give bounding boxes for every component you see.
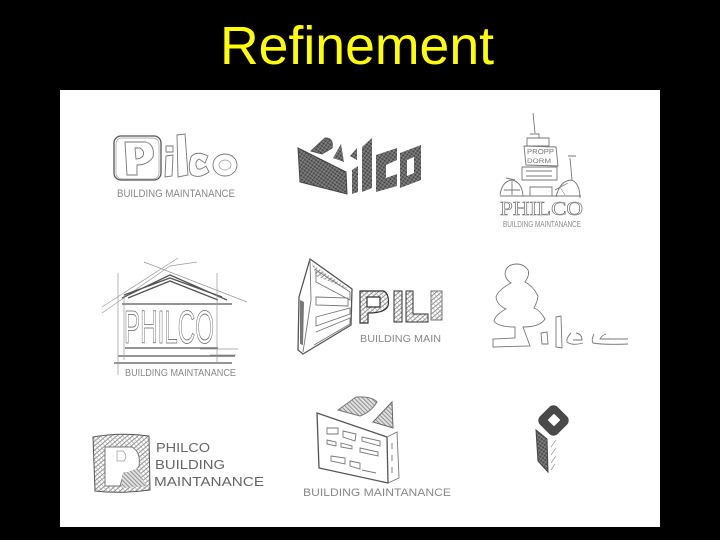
wordmark: PHILCO: PHILCO bbox=[500, 198, 583, 220]
sketch: Pilco boxed P logo bbox=[114, 134, 237, 200]
label: building main: BUILDING MAIN bbox=[360, 334, 441, 345]
wordmark: Philco building maintenance: MAINTANANCE bbox=[154, 474, 264, 489]
label: building maintenance: BUILDING MAINTANANCE bbox=[117, 188, 235, 200]
sketch: Philco hatched P logo bbox=[93, 434, 264, 492]
label: building maintenance: BUILDING MAINTANANCE bbox=[303, 487, 451, 499]
sketch: Philco skyscraper logo: DORM bbox=[527, 159, 551, 165]
small window text: PROPP bbox=[527, 149, 554, 156]
sketch: diamond and column icon bbox=[536, 403, 571, 472]
wordmark: Philco building maintenance bbox=[154, 440, 264, 489]
sketch: Philco temple logo bbox=[102, 258, 247, 379]
sketch: PILI slatted building logo bbox=[298, 259, 442, 354]
label: building maintenance: BUILDING MAINTANANCE bbox=[503, 220, 581, 229]
title: Refinement bbox=[220, 16, 494, 76]
sketch: building with windows logo bbox=[303, 397, 451, 499]
sketch: Philco skyscraper logo bbox=[500, 113, 583, 229]
wordmark: Philco building maintenance: BUILDING bbox=[155, 457, 225, 472]
sketch: isometric hatched Pilco logo bbox=[298, 138, 421, 194]
label: building maintenance: BUILDING MAINTANANCE bbox=[125, 368, 236, 379]
wordmark: Philco building maintenance: PHILCO bbox=[156, 440, 210, 455]
wordmark: PHILCO: PHILCO bbox=[124, 301, 214, 353]
sketch: tree Pilce logo bbox=[493, 264, 628, 348]
panel: sketch sheet bbox=[60, 90, 660, 527]
